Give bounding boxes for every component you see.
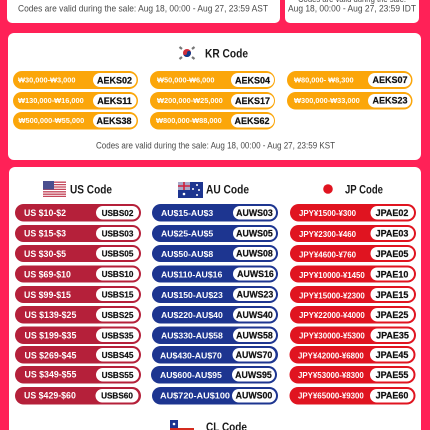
code pill: USBS55: US $349-$55 [24, 370, 76, 380]
code pill: AUWS70: AU$430-AU$70 [160, 350, 222, 360]
code pill: USBS03: US $15-$3 [24, 228, 66, 238]
code pill: AUWS00: AU$720-AU$100 [160, 390, 230, 400]
code pill: AEKS07: AEKS07 [372, 75, 408, 85]
code pill: JPAE55 [290, 366, 416, 384]
code pill: USBS03 [15, 225, 141, 242]
code pill: AEKS04: ₩50,000-₩6,000 [157, 76, 215, 84]
code pill: USBS60: USBS60 [101, 392, 133, 400]
code pill: USBS03: USBS03 [102, 230, 134, 238]
code pill: AUWS70: AUWS70 [236, 350, 272, 360]
code pill: JPAE10: JPY¥10000-¥1450 [299, 271, 365, 280]
code pill: AEKS38 [13, 112, 138, 130]
code pill: JPAE45 [290, 346, 416, 364]
code pill: JPAE02: JPY¥1500-¥300 [299, 209, 357, 218]
code pill: USBS35: USBS35 [102, 332, 134, 340]
code pill: USBS25: USBS25 [102, 311, 134, 320]
code pill: AEKS38: AEKS38 [96, 116, 132, 126]
panel: KR code [8, 33, 421, 160]
code pill: AUWS03: AU$15-AU$3 [161, 208, 213, 218]
code pill: JPAE60: JPY¥65000-¥9300 [298, 392, 364, 400]
code pill: USBS05 [15, 245, 141, 262]
code pill: USBS10: US $69-$10 [24, 270, 71, 280]
code pill: AUWS08: AU$50-AU$8 [161, 249, 213, 259]
heading: AU Code: AU Code [206, 184, 249, 196]
validity dates: top right: Aug 18, 00:00 - Aug 27, 23:59 IDT [288, 4, 416, 14]
code pill: AUWS95: AUWS95 [235, 370, 272, 380]
code pill: JPAE02: JPAE02 [376, 208, 408, 218]
code pill: AEKS11: ₩130,000-₩16,000 [18, 96, 84, 105]
code pill: AEKS02: AEKS02 [97, 75, 132, 85]
icon: US flag [43, 181, 66, 197]
code pill: AEKS62 [150, 112, 275, 130]
code pill: JPAE10: JPAE10 [376, 270, 408, 280]
code pill: AUWS95: AU$600-AU$95 [160, 370, 222, 380]
code pill: JPAE60: JPAE60 [376, 390, 408, 400]
code pill: JPAE10 [290, 266, 416, 282]
code pill: AUWS40 [152, 306, 278, 324]
code pill: USBS25: US $139-$25 [24, 310, 76, 320]
code pill: AUWS00 [152, 387, 278, 404]
code pill: AUWS00: AUWS00 [236, 390, 272, 400]
code pill: USBS15: US $99-$15 [24, 290, 71, 300]
code pill: AUWS08: AUWS08 [236, 248, 273, 258]
column: JP codes [290, 204, 416, 404]
code pill: AUWS40: AU$220-AU$40 [161, 310, 223, 320]
code pill: AUWS58 [152, 326, 278, 344]
code pill: AUWS05 [152, 225, 278, 242]
code pill: AEKS38: ₩500,000-₩55,000 [18, 116, 84, 125]
code pill: JPAE15: JPAE15 [376, 290, 408, 300]
code pill: AEKS02 [13, 71, 138, 89]
code pill: USBS60 [15, 387, 141, 404]
code pill: AEKS07 [287, 71, 412, 89]
code pill: AUWS23: AU$150-AU$23 [161, 290, 223, 300]
code pill: AUWS23 [152, 286, 278, 303]
code pill: USBS10: USBS10 [102, 270, 134, 279]
code pill: AUWS23: AUWS23 [237, 290, 273, 300]
code pill: USBS45: USBS45 [102, 351, 134, 360]
code pill: AEKS04 [150, 71, 275, 89]
code pill: JPAE25: JPY¥22000-¥4000 [299, 311, 365, 320]
validity note: KR: Codes are valid during the sale: Aug 18, 00:00 - Aug 27, 23:59 KST [96, 140, 335, 150]
column: AU codes [151, 204, 278, 404]
code pill: AEKS23 [287, 92, 412, 110]
code pill: AUWS70 [152, 346, 278, 364]
code pill: AUWS03 [152, 204, 278, 222]
code pill: AEKS11 [13, 92, 138, 110]
code pill: JPAE35 [290, 326, 416, 344]
code pill: JPAE25: JPAE25 [376, 310, 408, 320]
code pill: AUWS58: AUWS58 [236, 330, 273, 340]
code pill: AUWS16 [152, 266, 278, 282]
code pill: JPAE05: JPAE05 [376, 249, 408, 259]
code pill: USBS45 [15, 346, 141, 364]
code pill: JPAE03: JPY¥2300-¥460 [299, 230, 357, 239]
code pill: AEKS62: AEKS62 [234, 116, 270, 126]
heading: KR Code: KR Code [205, 48, 248, 60]
panel: top right partial [285, 0, 419, 23]
code pill: AEKS07: ₩80,000- ₩8,300 [294, 76, 354, 84]
code pill: USBS10 [15, 266, 141, 282]
code pill: JPAE03: JPAE03 [376, 228, 408, 238]
code pill: USBS15 [15, 286, 141, 303]
code pill: JPAE05 [290, 245, 416, 262]
heading: JP Code: JP Code [345, 184, 383, 196]
code pill: AEKS17: AEKS17 [235, 96, 270, 106]
code pill: JPAE05: JPY¥4600-¥760 [299, 250, 357, 260]
icon: CL flag [170, 420, 194, 430]
panel: regional codes [9, 167, 421, 430]
code pill: AUWS16: AUWS16 [237, 269, 274, 279]
code pill: AEKS04: AEKS04 [235, 75, 270, 85]
code pill: JPAE45: JPY¥42000-¥6800 [298, 352, 364, 360]
code pill: JPAE60 [290, 387, 416, 404]
code pill: AUWS05: AU$25-AU$5 [161, 228, 213, 238]
icon: JP flag [323, 184, 333, 194]
code pill: JPAE55: JPAE55 [376, 370, 408, 380]
code pill: AEKS02: ₩30,000-₩3,000 [18, 76, 76, 84]
code pill: AUWS05: AUWS05 [236, 228, 273, 238]
code pill: JPAE55: JPY¥53000-¥8300 [298, 371, 364, 380]
code pill: USBS55 [15, 366, 141, 384]
code pill: AEKS11: AEKS11 [97, 96, 132, 106]
code pill: JPAE45: JPAE45 [376, 350, 408, 360]
code pill: AUWS03: AUWS03 [236, 208, 273, 218]
code pill: AEKS17 [150, 92, 275, 110]
code pill: USBS02: US $10-$2 [24, 208, 66, 218]
code pill: JPAE35: JPAE35 [376, 330, 409, 340]
code pill: AEKS23: AEKS23 [372, 96, 408, 106]
code pill: USBS05: US $30-$5 [24, 249, 66, 259]
code pill: USBS15: USBS15 [102, 290, 134, 300]
column: US codes [15, 204, 141, 404]
code pill: USBS02 [15, 204, 141, 222]
code pill: USBS25 [15, 306, 141, 324]
code pill: JPAE35: JPY¥30000-¥5300 [299, 332, 365, 340]
code pill: JPAE02 [290, 204, 416, 222]
code pill: JPAE03 [290, 225, 416, 242]
code pill: AUWS08 [152, 245, 278, 262]
code pill: JPAE15 [290, 286, 416, 303]
code pill: AUWS58: AU$330-AU$58 [161, 330, 223, 340]
code pill: USBS60: US $429-$60 [24, 390, 76, 400]
code pill: AUWS40: AUWS40 [236, 310, 273, 320]
validity note: top left: Codes are valid during the sale: Aug 18, 00:00 - Aug 27, 23:59 AST [18, 4, 268, 14]
code pill: AEKS17: ₩200,000-₩25,000 [157, 96, 223, 105]
code pill: USBS05: USBS05 [102, 250, 134, 258]
code pill: AUWS95 [151, 366, 277, 384]
icon: KR flag [178, 44, 196, 62]
code pill: USBS35 [15, 326, 141, 344]
code pill: USBS45: US $269-$45 [24, 350, 76, 360]
code pill: USBS55: USBS55 [102, 371, 134, 380]
code pill: AUWS16: AU$110-AU$16 [161, 270, 222, 280]
heading: US Code: US Code [70, 184, 112, 196]
code pill: JPAE15: JPY¥15000-¥2300 [299, 292, 365, 300]
code pill: USBS35: US $199-$35 [24, 330, 76, 340]
icon: AU flag [178, 182, 203, 198]
code pill: AEKS23: ₩300,000-₩33,000 [294, 96, 360, 105]
code pill: JPAE25 [290, 306, 416, 324]
panel: top left partial [7, 0, 280, 23]
code pill: AEKS62: ₩800,000-₩88,000 [156, 116, 222, 125]
code pill: USBS02: USBS02 [102, 209, 134, 218]
